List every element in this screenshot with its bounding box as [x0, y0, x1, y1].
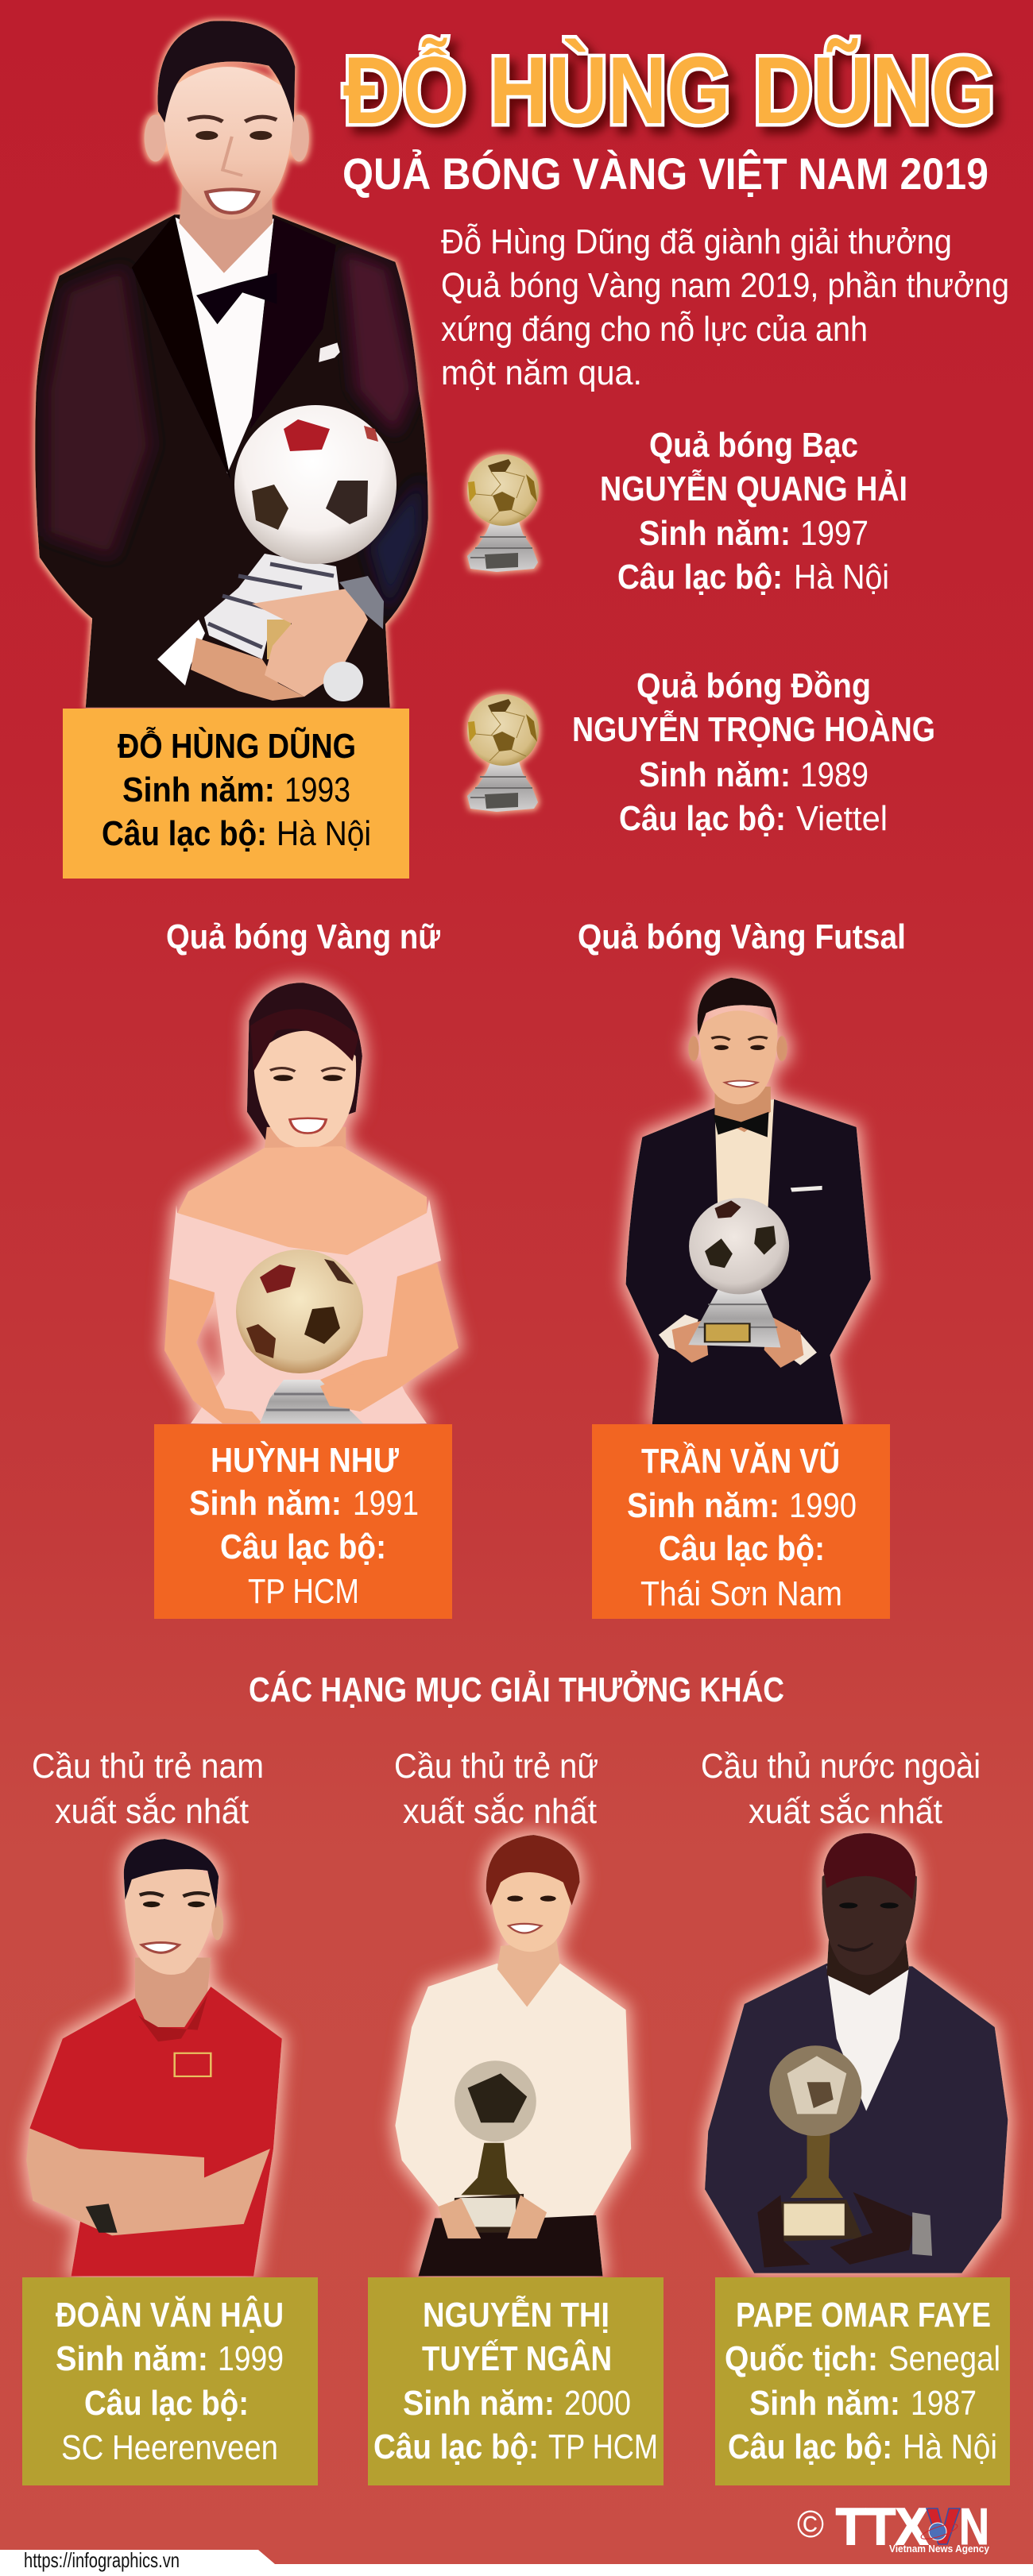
info box: Huỳnh Như: TP HCM [248, 1572, 359, 1611]
footer band with source url [0, 2548, 1033, 2576]
info box: Nguyễn Thị Tuyết Ngân: NGUYỄN THỊ [423, 2295, 609, 2335]
info box: Nguyễn Thị Tuyết Ngân: 2000 [564, 2384, 631, 2423]
bronze ball text: NGUYỄN TRỌNG HOÀNG [572, 709, 935, 749]
info box: Pape Omar Faye: Quốc tịch: [725, 2339, 878, 2378]
info box: Trần Văn Vũ: Câu lạc bộ: [659, 1529, 825, 1568]
silver ball text: Hà Nội [794, 558, 889, 597]
info box: Nguyễn Thị Tuyết Ngân [368, 2277, 664, 2485]
info box: Đoàn Văn Hậu [22, 2277, 318, 2485]
photo: Trần Văn Vũ [626, 978, 871, 1424]
shoulders, dress, arms and trophy [164, 1146, 458, 1423]
silver ball text: Quả bóng Bạc [649, 426, 858, 465]
info box: Huỳnh Như: HUỲNH NHƯ [211, 1440, 399, 1480]
icon: silver ball trophy [467, 454, 539, 572]
logo: TTXVN Vietnam News Agency [797, 2497, 990, 2555]
category label: best young male player: xuất sắc nhất [55, 1792, 249, 1831]
info box: Trần Văn Vũ: TRẦN VĂN VŨ [641, 1441, 840, 1481]
info box: Huỳnh Như: 1991 [353, 1484, 419, 1523]
info box: Đoàn Văn Hậu: SC Heerenveen [61, 2428, 278, 2467]
photo: Huỳnh Như [164, 983, 458, 1423]
panel: silver ball winner [467, 426, 907, 597]
icon: bronze ball trophy [467, 694, 539, 812]
logo: TTXVN Vietnam News Agency: N [959, 2497, 989, 2555]
info box: Pape Omar Faye: Senegal [888, 2339, 1000, 2378]
info box: Huỳnh Như [154, 1424, 452, 1619]
bronze ball text: Viettel [796, 799, 888, 838]
info box: Đỗ Hùng Dũng [63, 709, 409, 879]
silver ball text: NGUYỄN QUANG HẢI [600, 469, 907, 508]
category label: best foreign player: Cầu thủ nước ngoài [701, 1747, 981, 1786]
category label: best foreign player: xuất sắc nhất [749, 1792, 942, 1831]
info box: Nguyễn Thị Tuyết Ngân: TP HCM [548, 2427, 658, 2466]
info box: Trần Văn Vũ: 1990 [789, 1486, 857, 1525]
info box: Đoàn Văn Hậu: ĐOÀN VĂN HẬU [56, 2295, 284, 2335]
heading: other award categories: CÁC HẠNG MỤC GIẢI THƯỞNG KHÁC [249, 1669, 784, 1709]
heading: futsal golden ball: Quả bóng Vàng Futsal [578, 917, 906, 956]
category label: best young female player [394, 1747, 598, 1831]
bronze ball text: Câu lạc bộ: [619, 799, 786, 838]
intro paragraph: Đỗ Hùng Dũng đã giành giải thưởng [441, 222, 952, 261]
info box: Đỗ Hùng Dũng: Câu lạc bộ: [102, 814, 267, 853]
info box: Trần Văn Vũ [592, 1424, 890, 1619]
info box: Đoàn Văn Hậu: Sinh năm: [56, 2339, 208, 2378]
info box: Đỗ Hùng Dũng: ĐỖ HÙNG DŨNG [118, 725, 356, 766]
info box: Đoàn Văn Hậu: Câu lạc bộ: [84, 2384, 249, 2423]
bronze ball text: 1989 [800, 755, 869, 794]
panel: bronze ball winner [467, 666, 935, 838]
intro paragraph: xứng đáng cho nỗ lực của anh [441, 310, 868, 349]
category label: best young male player [32, 1747, 264, 1831]
info box: Pape Omar Faye: Sinh năm: [749, 2384, 900, 2423]
info box: Trần Văn Vũ: Thái Sơn Nam [640, 1574, 842, 1613]
bronze ball text [572, 666, 935, 838]
category label: best foreign player [701, 1747, 981, 1831]
trophy base, ball and hands [157, 405, 397, 701]
bronze ball text: Sinh năm: [639, 755, 791, 794]
footer band with source url: https://infographics.vn [24, 2548, 180, 2572]
logo: TTXVN Vietnam News Agency: © [797, 2504, 824, 2546]
info box: Pape Omar Faye [715, 2277, 1010, 2485]
heading: women's golden ball: Quả bóng Vàng nữ [166, 917, 440, 956]
photo: Pape Omar Faye [705, 1833, 1008, 2273]
info box: Pape Omar Faye: Câu lạc bộ: [728, 2427, 892, 2466]
info box: Đoàn Văn Hậu: 1999 [218, 2339, 284, 2378]
jacket and head [35, 21, 428, 708]
category label: best young male player: Cầu thủ trẻ nam [32, 1747, 264, 1786]
silver ball text [600, 426, 907, 597]
intro paragraph [441, 222, 1009, 392]
category label: best young female player: xuất sắc nhất [403, 1792, 597, 1831]
photo: Nguyễn Thị Tuyết Ngân [395, 1835, 631, 2276]
logo: TTXVN Vietnam News Agency: Vietnam News Agency [889, 2543, 990, 2555]
photo: Đoàn Văn Hậu [26, 1839, 282, 2276]
bronze ball text: Quả bóng Đồng [636, 666, 871, 705]
head and hair [247, 983, 362, 1157]
info box: Đỗ Hùng Dũng: 1993 [284, 770, 350, 809]
intro paragraph: một năm qua. [441, 353, 642, 392]
info box: Nguyễn Thị Tuyết Ngân: Sinh năm: [403, 2384, 555, 2423]
info box: Huỳnh Như: Sinh năm: [189, 1484, 342, 1523]
info box: Huỳnh Như: Câu lạc bộ: [220, 1527, 386, 1566]
silver ball text: Câu lạc bộ: [617, 558, 783, 597]
silver ball text: Sinh năm: [639, 514, 791, 553]
logo: TTXVN Vietnam News Agency: TTX [836, 2497, 928, 2555]
info box: Trần Văn Vũ: Sinh năm: [627, 1486, 780, 1525]
category label: best young female player: Cầu thủ trẻ nữ [394, 1747, 598, 1786]
info box: Nguyễn Thị Tuyết Ngân: Câu lạc bộ: [373, 2427, 539, 2466]
silver ball text: 1997 [800, 514, 869, 553]
info box: Pape Omar Faye: 1987 [911, 2384, 977, 2423]
info box: Đỗ Hùng Dũng: Sinh năm: [122, 770, 275, 809]
photo: Đỗ Hùng Dũng with golden ball [35, 21, 428, 708]
info box: Pape Omar Faye: Hà Nội [903, 2427, 997, 2466]
info box: Nguyễn Thị Tuyết Ngân: TUYẾT NGÂN [422, 2338, 612, 2378]
info box: Đỗ Hùng Dũng: Hà Nội [277, 814, 371, 853]
